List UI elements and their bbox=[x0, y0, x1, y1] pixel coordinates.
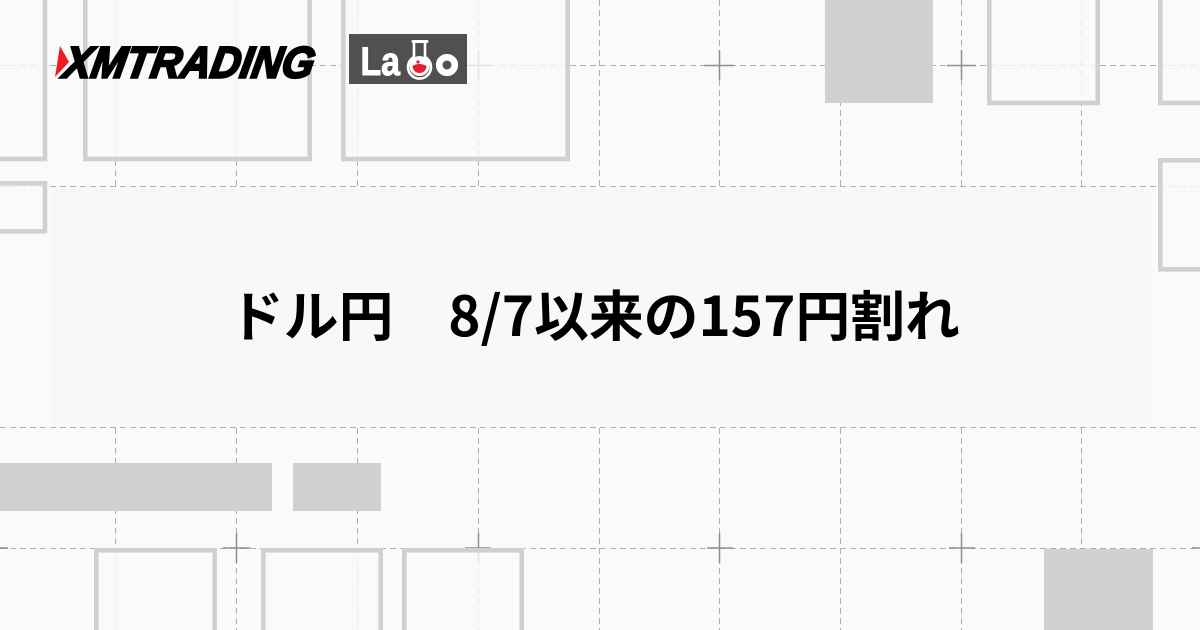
outlined rectangles bottom bbox=[96, 550, 522, 630]
logo: Lab: La bbox=[360, 40, 401, 84]
logo: XMTRADING: XMTRADING bbox=[57, 39, 319, 87]
title: ドル円 8/7以来の157円割れ bbox=[229, 272, 960, 352]
logo: Lab bbox=[349, 34, 467, 84]
icon: flask bbox=[408, 40, 431, 79]
outlined rectangles top bbox=[0, 0, 1200, 269]
central title panel bbox=[52, 187, 1150, 427]
